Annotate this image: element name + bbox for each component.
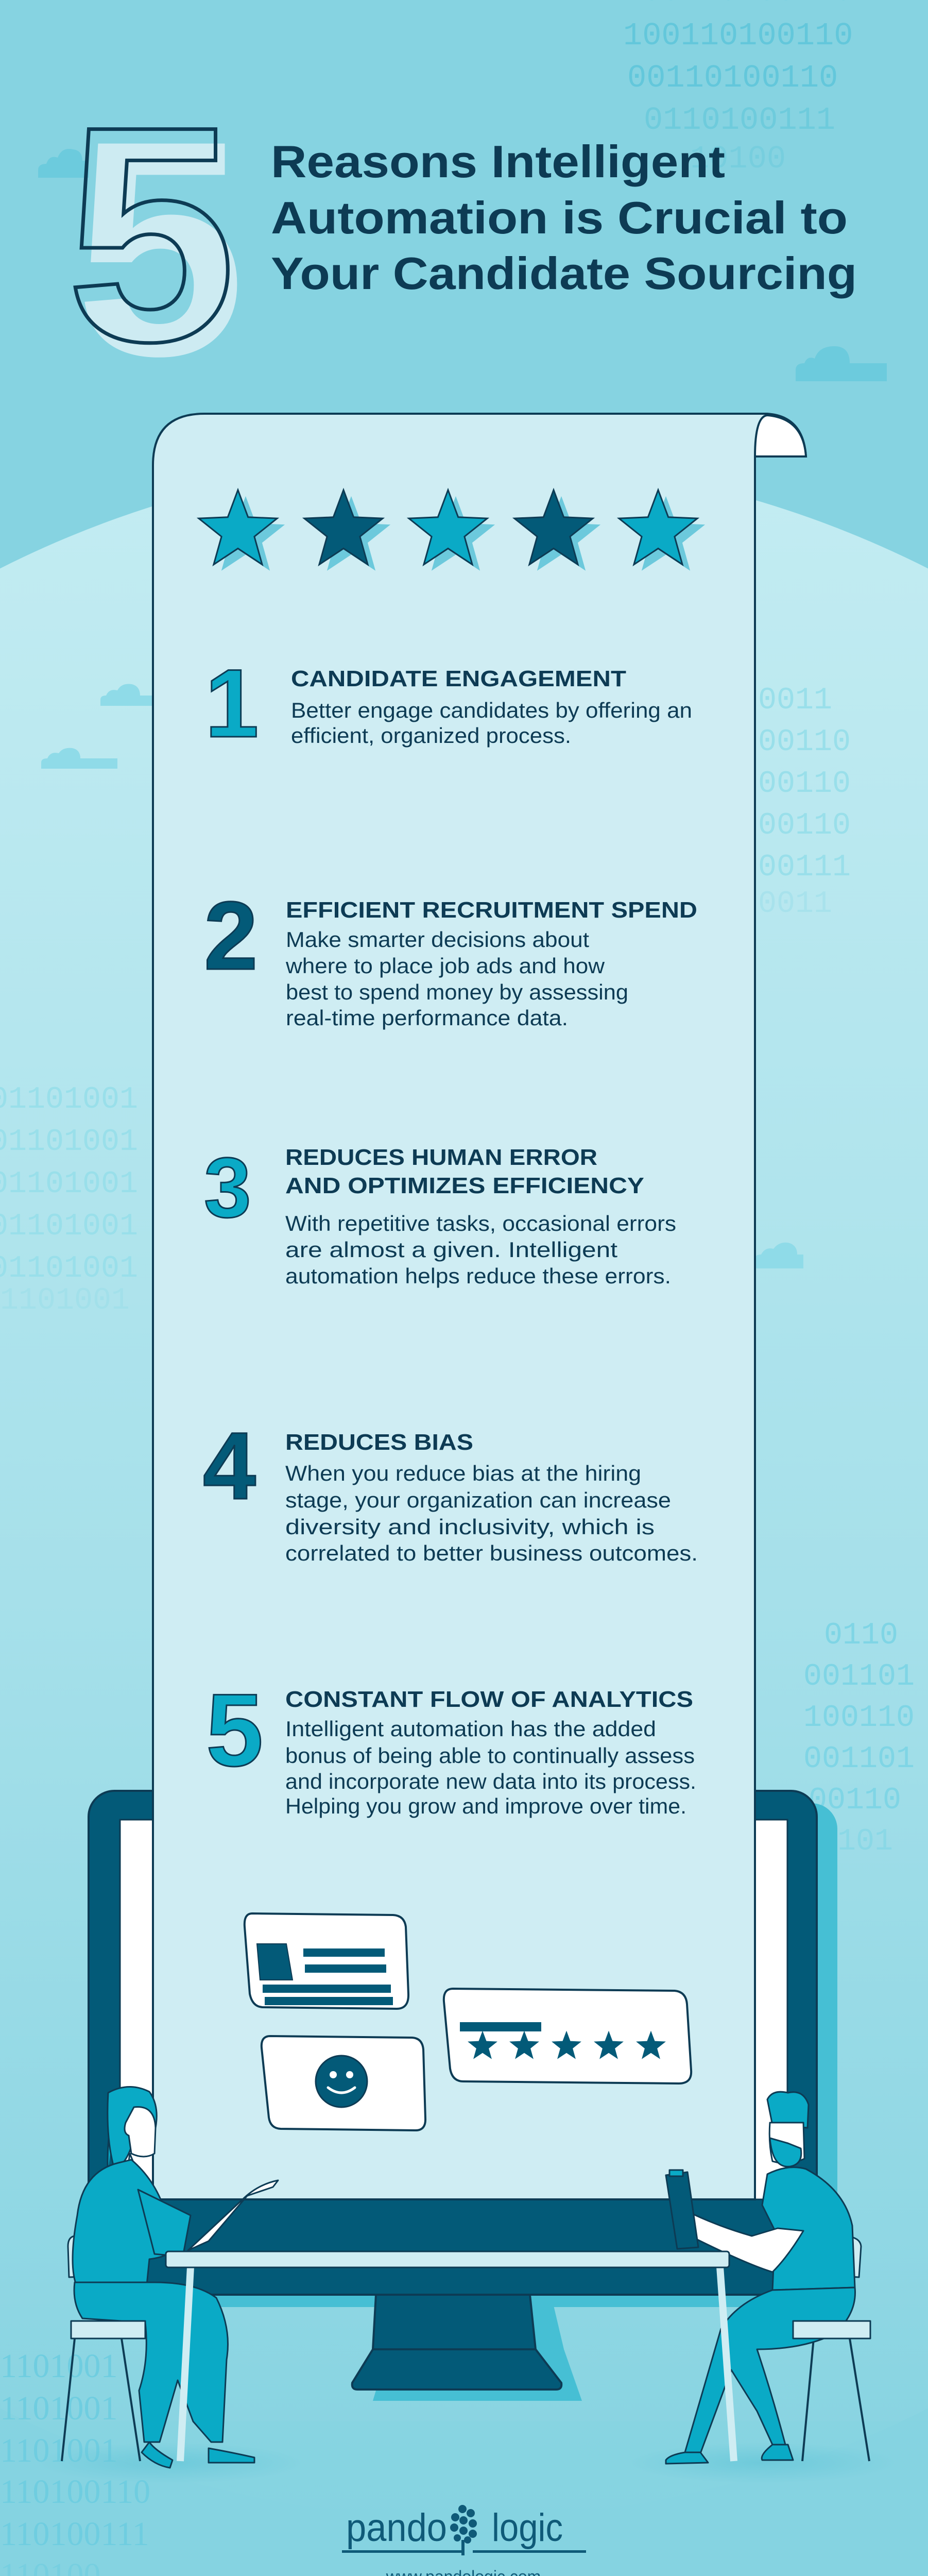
clouds xyxy=(38,149,887,1268)
item 5: constant flow of analytics: and incorporate new data into its process. xyxy=(285,1769,696,1793)
title xyxy=(271,136,857,299)
item 4: reduces bias: stage, your organization can increase xyxy=(285,1488,671,1512)
title: Reasons Intelligent xyxy=(271,136,725,187)
binary decoration lower right xyxy=(803,1618,915,1859)
item 4: reduces bias: 4 xyxy=(203,1413,256,1519)
binary decoration top right: 100110100110 xyxy=(623,18,853,54)
item 3: reduces human error: automation helps reduce these errors. xyxy=(285,1264,671,1288)
item 2: efficient recruitment spend: best to spend money by assessing xyxy=(286,980,628,1004)
binary decoration lower right: 100110 xyxy=(803,1701,915,1736)
table xyxy=(166,2251,734,2461)
item 4: reduces bias: When you reduce bias at the hiring xyxy=(285,1461,641,1485)
woman seated left xyxy=(62,2087,278,2468)
card: smiley xyxy=(262,2036,425,2130)
man seated right xyxy=(666,2092,870,2464)
item 4: reduces bias: correlated to better business outcomes. xyxy=(285,1541,698,1565)
item 5: constant flow of analytics: Intelligent automation has the added xyxy=(285,1717,656,1741)
binary decoration middle left xyxy=(0,1082,138,1318)
binary decoration middle right: 00110 xyxy=(758,808,851,843)
item 1: candidate engagement: Better engage candidates by offering an xyxy=(291,698,692,722)
floor shadows xyxy=(36,2442,896,2483)
item 5: constant flow of analytics: 5 xyxy=(206,1673,263,1788)
binary decoration middle left: 1101001 xyxy=(0,1283,130,1318)
item 4: reduces bias xyxy=(203,1413,698,1565)
binary decoration bottom left: 1101001 xyxy=(0,2389,118,2427)
binary decoration middle right: 00110 xyxy=(758,767,851,802)
big number 5: 5 xyxy=(66,63,236,405)
item 2: efficient recruitment spend: where to place job ads and how xyxy=(285,954,605,978)
binary decoration middle right: 0011 xyxy=(758,683,832,718)
item 5: constant flow of analytics: CONSTANT FLOW OF ANALYTICS xyxy=(285,1687,693,1712)
item 2: efficient recruitment spend: EFFICIENT RECRUITMENT SPEND xyxy=(286,897,697,923)
logo: pandologic: pando xyxy=(346,2506,447,2550)
paper scroll xyxy=(153,414,806,2199)
binary decoration lower right: 0110 xyxy=(824,1618,898,1653)
item 5: constant flow of analytics: bonus of being able to continually assess xyxy=(285,1743,695,1768)
logo: pandologic: logic xyxy=(492,2506,563,2550)
item 1: candidate engagement xyxy=(205,649,692,757)
binary decoration middle right: 00110 xyxy=(758,725,851,760)
item 3: reduces human error: AND OPTIMIZES EFFICIENCY xyxy=(285,1173,644,1198)
card: profile xyxy=(245,1913,408,2009)
item 5: constant flow of analytics: Helping you grow and improve over time. xyxy=(285,1794,686,1818)
item 3: reduces human error xyxy=(204,1140,676,1288)
item 1: candidate engagement: 1 xyxy=(205,649,259,757)
binary decoration middle right: 0011 xyxy=(758,887,832,922)
binary decoration top right xyxy=(623,0,853,177)
item 1: candidate engagement: efficient, organized process. xyxy=(291,723,571,748)
binary decoration bottom left: 1101001 xyxy=(0,2347,118,2385)
title: Your Candidate Sourcing xyxy=(271,248,857,299)
logo: pandologic xyxy=(342,2505,586,2576)
binary decoration top right: 0110100111 xyxy=(644,102,835,139)
binary decoration lower right: 001101 xyxy=(803,1659,915,1694)
big number 5: 5 xyxy=(75,77,246,420)
item 4: reduces bias: diversity and inclusivity, which is xyxy=(285,1515,655,1539)
item 2: efficient recruitment spend: real-time performance data. xyxy=(286,1006,568,1030)
binary decoration lower right: 1101 xyxy=(819,1824,893,1859)
binary decoration bottom left: 110100110 xyxy=(0,2473,150,2511)
binary decoration middle right: 00111 xyxy=(758,850,851,885)
item 3: reduces human error: 3 xyxy=(204,1140,251,1235)
background arc xyxy=(0,458,928,2519)
item 4: reduces bias: REDUCES BIAS xyxy=(285,1430,473,1455)
item 2: efficient recruitment spend: Make smarter decisions about xyxy=(286,927,589,952)
title: Automation is Crucial to xyxy=(271,192,848,243)
item 3: reduces human error: With repetitive tasks, occasional errors xyxy=(285,1211,676,1235)
item 1: candidate engagement: CANDIDATE ENGAGEMENT xyxy=(291,666,626,691)
item 5: constant flow of analytics xyxy=(206,1673,696,1818)
binary decoration lower right: 001101 xyxy=(803,1742,915,1777)
binary decoration bottom left xyxy=(0,2347,150,2576)
binary decoration top right: 00110100110 xyxy=(627,60,838,96)
binary decoration lower right: 00110 xyxy=(809,1783,901,1818)
item 2: efficient recruitment spend: 2 xyxy=(204,882,258,990)
card: star rating xyxy=(444,1989,691,2083)
binary decoration middle right xyxy=(758,683,851,922)
item 3: reduces human error: REDUCES HUMAN ERROR xyxy=(285,1145,597,1170)
binary decoration bottom left: 110100111 xyxy=(0,2515,149,2553)
rating stars xyxy=(199,490,705,571)
item 2: efficient recruitment spend xyxy=(204,882,697,1030)
binary decoration top right: 10100 xyxy=(690,141,786,177)
binary decoration bottom left: 1101001 xyxy=(0,2432,118,2469)
monitor xyxy=(89,1791,837,2401)
item 3: reduces human error: are almost a given. Intelligent xyxy=(285,1238,617,1262)
